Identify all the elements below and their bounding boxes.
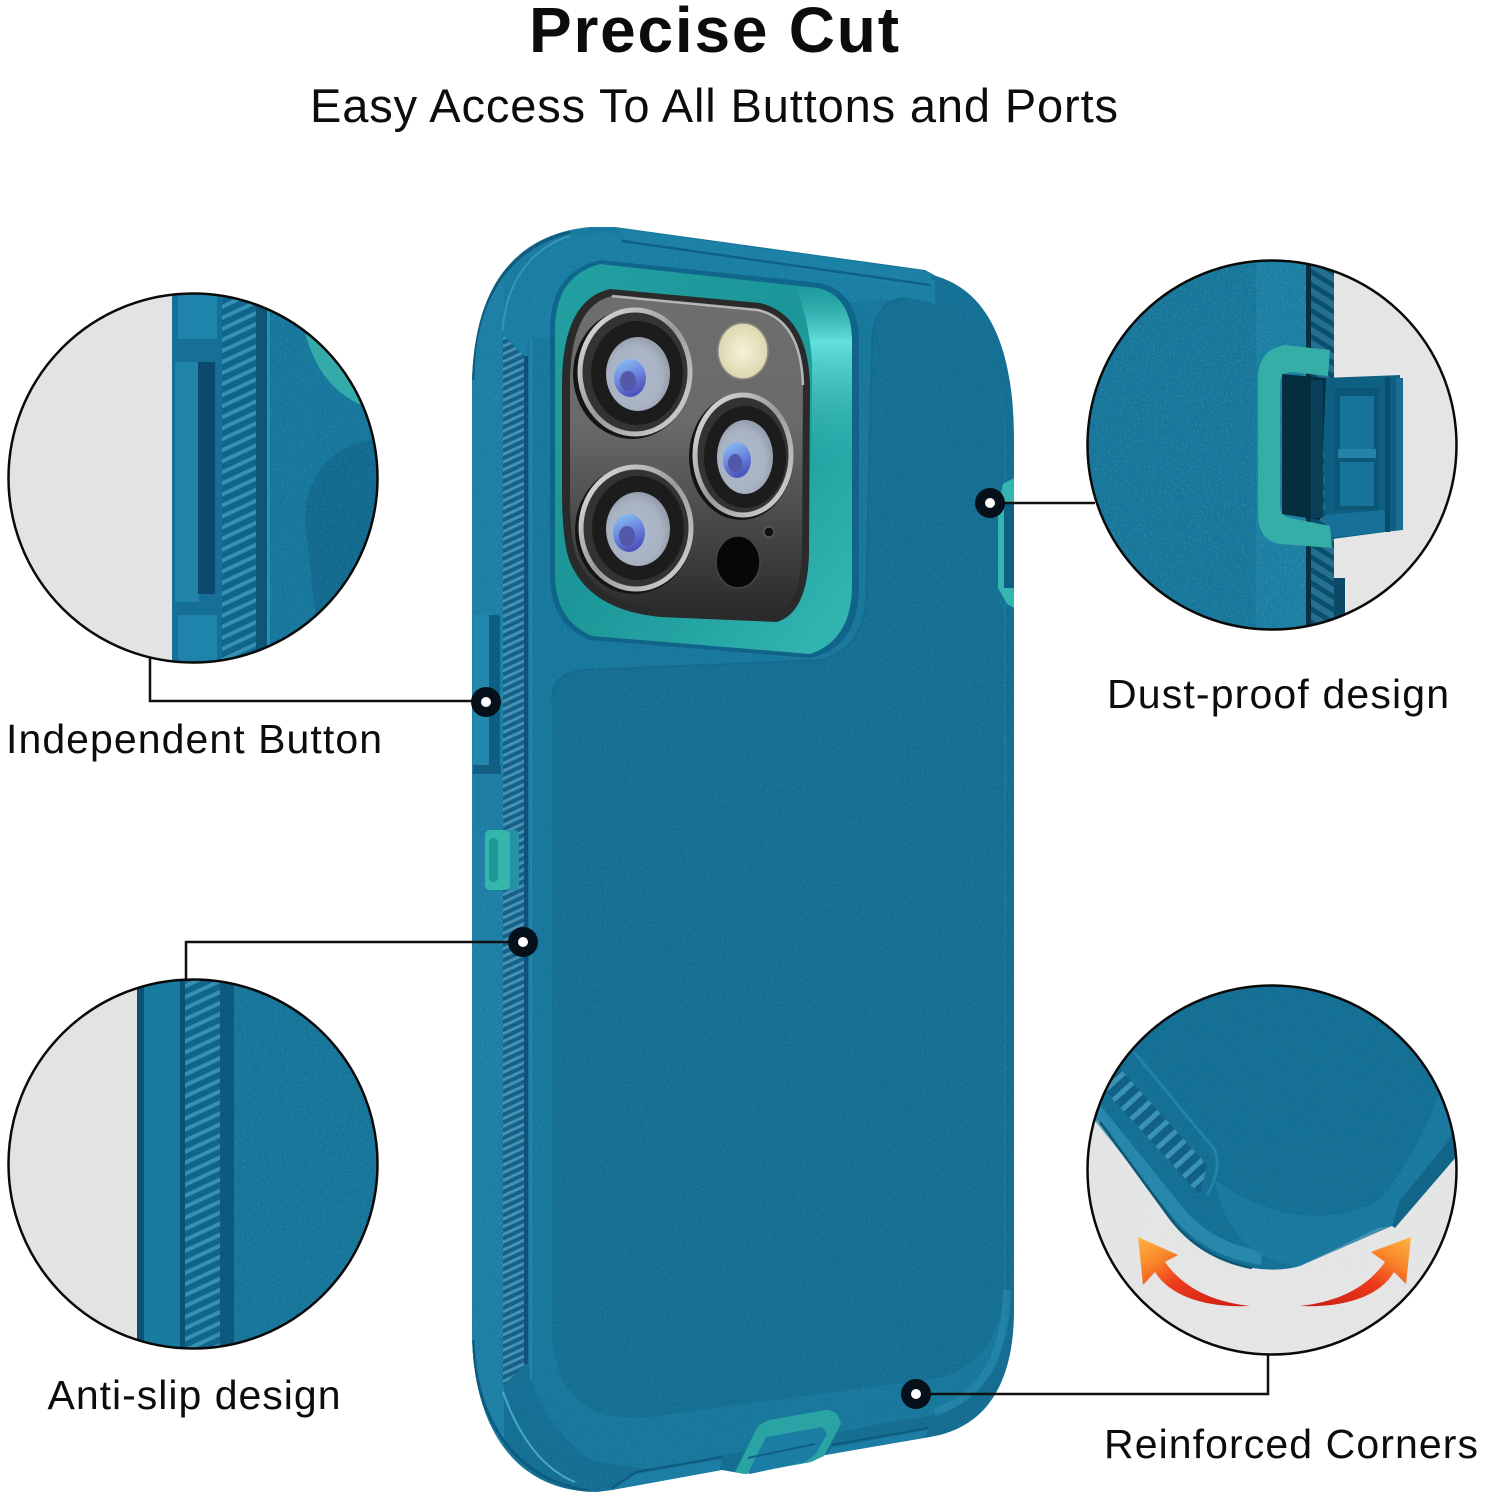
top edge band	[638, 235, 932, 280]
lens: bottom left	[575, 466, 693, 594]
raised back panel	[552, 298, 1004, 1418]
lens: top left	[573, 309, 691, 439]
camera bezel	[550, 260, 859, 658]
lidar sensor	[716, 536, 760, 588]
surface texture	[472, 227, 1014, 1492]
teal side clip	[485, 830, 519, 890]
leader line	[990, 502, 1095, 504]
marker dot	[508, 927, 538, 957]
ribbed strip	[1106, 1068, 1207, 1195]
detail circle	[8, 292, 380, 665]
leader line	[186, 942, 523, 980]
label: Independent Button	[6, 716, 382, 762]
left arrow	[1138, 1237, 1250, 1306]
right arrow	[1300, 1237, 1411, 1306]
teal bracket	[1258, 345, 1332, 548]
case body	[472, 227, 1014, 1492]
microphone	[764, 527, 774, 537]
phone case	[472, 227, 1014, 1492]
callout: dust-proof design	[975, 260, 1457, 717]
main surface	[527, 300, 1006, 1470]
callout: independent button	[6, 292, 501, 762]
callout: anti-slip design	[8, 927, 538, 1418]
marker dot	[975, 488, 1005, 518]
leader line	[916, 1355, 1268, 1394]
bottom corner highlight	[503, 1392, 575, 1482]
side button	[473, 615, 501, 827]
flash	[718, 323, 768, 379]
marker dot	[471, 687, 501, 717]
label: Dust-proof design	[1107, 671, 1449, 717]
camera module	[562, 289, 810, 622]
dust plug flap	[1323, 375, 1403, 540]
detail circle	[1087, 260, 1457, 630]
lens: right	[689, 394, 793, 520]
label: Reinforced Corners	[1104, 1421, 1478, 1467]
label: Anti-slip design	[48, 1372, 340, 1418]
right port cover	[998, 478, 1014, 608]
bottom port cover	[612, 1410, 928, 1490]
callout: reinforced corners	[901, 980, 1478, 1467]
detail circle	[8, 979, 380, 1349]
anti-slip grip	[503, 335, 524, 1386]
detail circle	[1085, 980, 1462, 1355]
leader line	[150, 658, 486, 701]
left edge strip	[472, 240, 504, 1490]
top left corner surface	[689, 255, 935, 304]
subtitle: Easy Access To All Buttons and Ports	[310, 79, 1118, 132]
corner body	[1085, 980, 1460, 1270]
marker dot	[901, 1379, 931, 1409]
